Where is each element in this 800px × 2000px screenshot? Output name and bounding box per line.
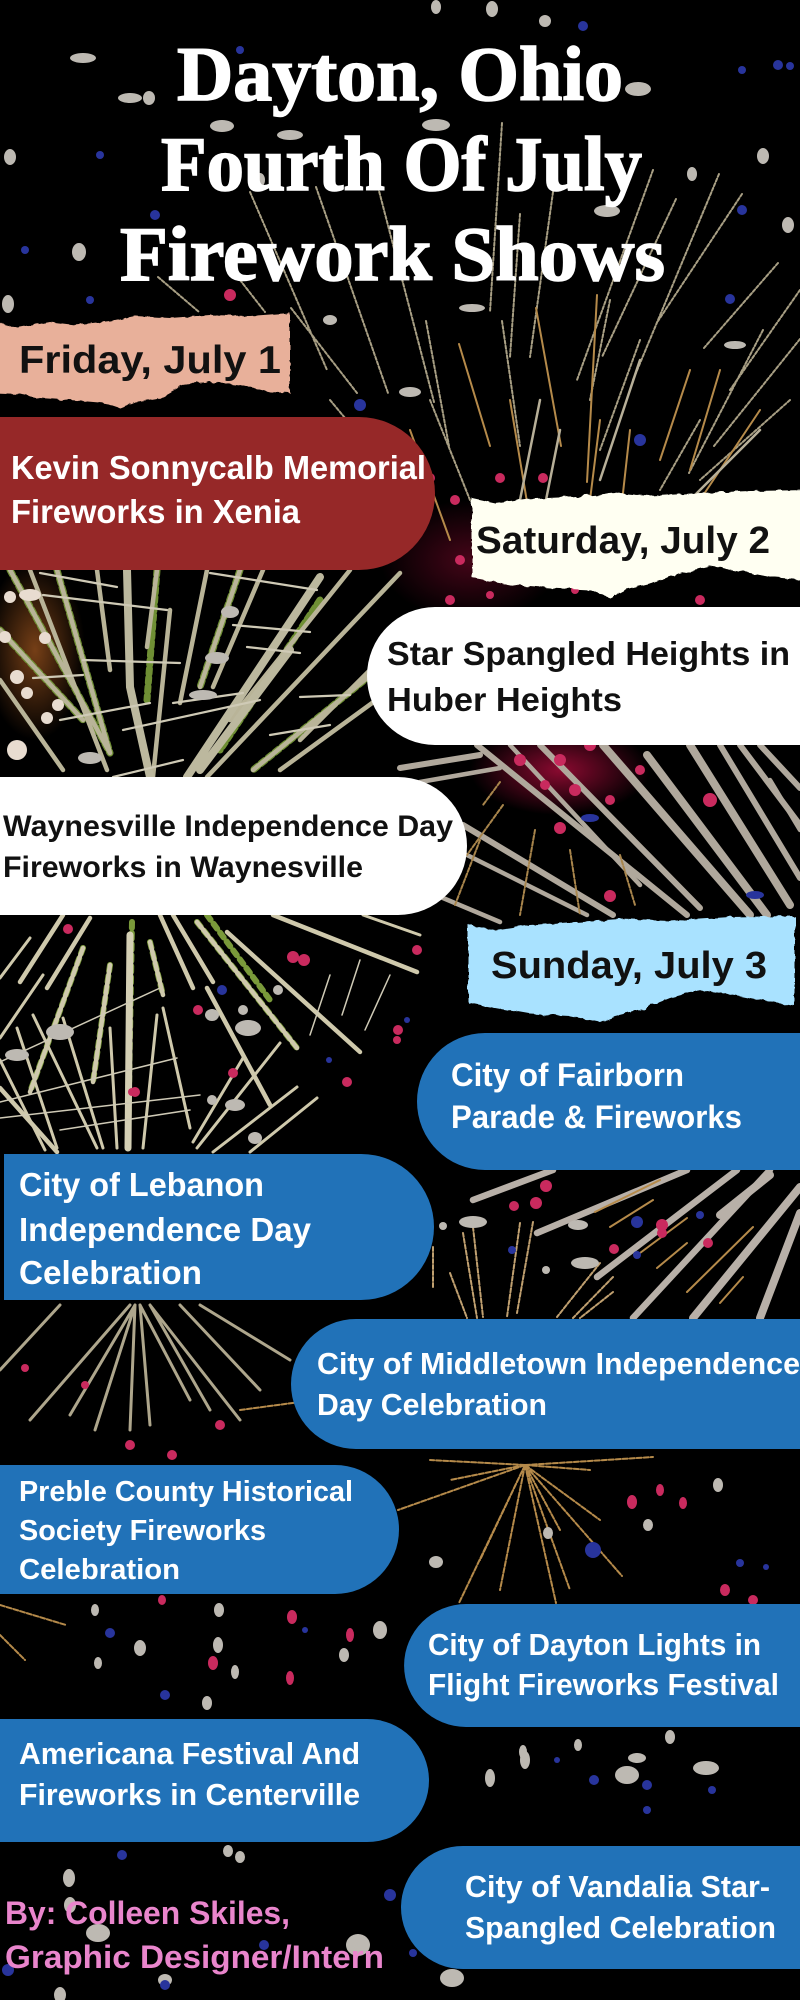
date tag: Sunday, July 3 bbox=[468, 916, 795, 1022]
event pill: City of Dayton Lights in Flight: Flight Fireworks Festival bbox=[428, 1667, 779, 1702]
event pill: Star Spangled Heights: Star Spangled Heights in bbox=[387, 635, 790, 672]
event pill: Preble County Historical Society: Preble County Historical bbox=[19, 1476, 353, 1508]
event pill: City of Middletown: City of Middletown Independence bbox=[317, 1346, 800, 1381]
event pill: City of Lebanon: City of Lebanon bbox=[19, 1166, 264, 1203]
event pill: Star Spangled Heights: Huber Heights bbox=[387, 681, 622, 718]
event pill: City of Vandalia: City of Vandalia Star- bbox=[465, 1869, 770, 1904]
event pill: Americana Festival: Fireworks in Centerville bbox=[19, 1777, 360, 1812]
event pill: Americana Festival: Americana Festival And bbox=[19, 1736, 360, 1771]
event pill: Preble County Historical Society bbox=[0, 1465, 399, 1594]
below-Lebanon fan bbox=[0, 1305, 290, 1430]
event pill: City of Dayton Lights in Flight: City of Dayton Lights in bbox=[428, 1627, 761, 1662]
event pill: City of Lebanon bbox=[4, 1154, 434, 1300]
title: Dayton, Ohio bbox=[177, 31, 623, 117]
event pill: Waynesville Independence Day: Waynesville Independence Day bbox=[3, 810, 453, 843]
title: Fourth Of July bbox=[161, 121, 642, 207]
event pill: Waynesville Independence Day bbox=[0, 777, 467, 915]
event pill: City of Lebanon: Celebration bbox=[19, 1254, 202, 1291]
event pill: City of Middletown bbox=[291, 1319, 800, 1449]
event pill: Star Spangled Heights bbox=[367, 607, 800, 745]
event pill: City of Dayton Lights in Flight bbox=[404, 1604, 800, 1727]
date tag: Friday, July 1: Friday, July 1 bbox=[19, 339, 281, 382]
event pill: Kevin Sonnycalb Memorial Fireworks: Fireworks in Xenia bbox=[11, 493, 301, 530]
event pill: City of Lebanon: Independence Day bbox=[19, 1211, 312, 1248]
upper-left burst bbox=[0, 570, 377, 770]
event pill: Waynesville Independence Day: Fireworks in Waynesville bbox=[3, 851, 363, 884]
event pill: Preble County Historical Society: Celebration bbox=[19, 1554, 180, 1586]
author credit: Graphic Designer/Intern bbox=[5, 1939, 384, 1975]
author credit bbox=[5, 1895, 384, 1975]
date tag: Friday, July 1 bbox=[0, 313, 290, 408]
event pill: City of Vandalia: Spangled Celebration bbox=[465, 1910, 776, 1945]
right-middle burst bbox=[400, 745, 800, 915]
title bbox=[120, 31, 665, 297]
event pill: Kevin Sonnycalb Memorial Fireworks: Kevin Sonnycalb Memorial bbox=[11, 449, 426, 486]
event pill: Kevin Sonnycalb Memorial Fireworks bbox=[0, 417, 435, 570]
event pill: City of Vandalia bbox=[401, 1846, 800, 1969]
event pill: Americana Festival bbox=[0, 1719, 429, 1842]
lower-right burst bbox=[473, 1170, 770, 1318]
title: Firework Shows bbox=[120, 211, 665, 297]
event pill: Preble County Historical Society: Society Fireworks bbox=[19, 1515, 266, 1547]
event pill: City of Fairborn: City of Fairborn bbox=[451, 1057, 684, 1093]
date tag: Saturday, July 2: Saturday, July 2 bbox=[476, 520, 770, 562]
middle-left burst bbox=[30, 915, 297, 1148]
event pill: City of Fairborn: Parade & Fireworks bbox=[451, 1099, 742, 1135]
author credit: By: Colleen Skiles, bbox=[5, 1895, 290, 1931]
date tag: Sunday, July 3: Sunday, July 3 bbox=[491, 945, 767, 987]
date tag: Saturday, July 2 bbox=[472, 490, 800, 598]
event pill: City of Middletown: Day Celebration bbox=[317, 1387, 547, 1422]
event pill: City of Fairborn bbox=[417, 1033, 800, 1170]
